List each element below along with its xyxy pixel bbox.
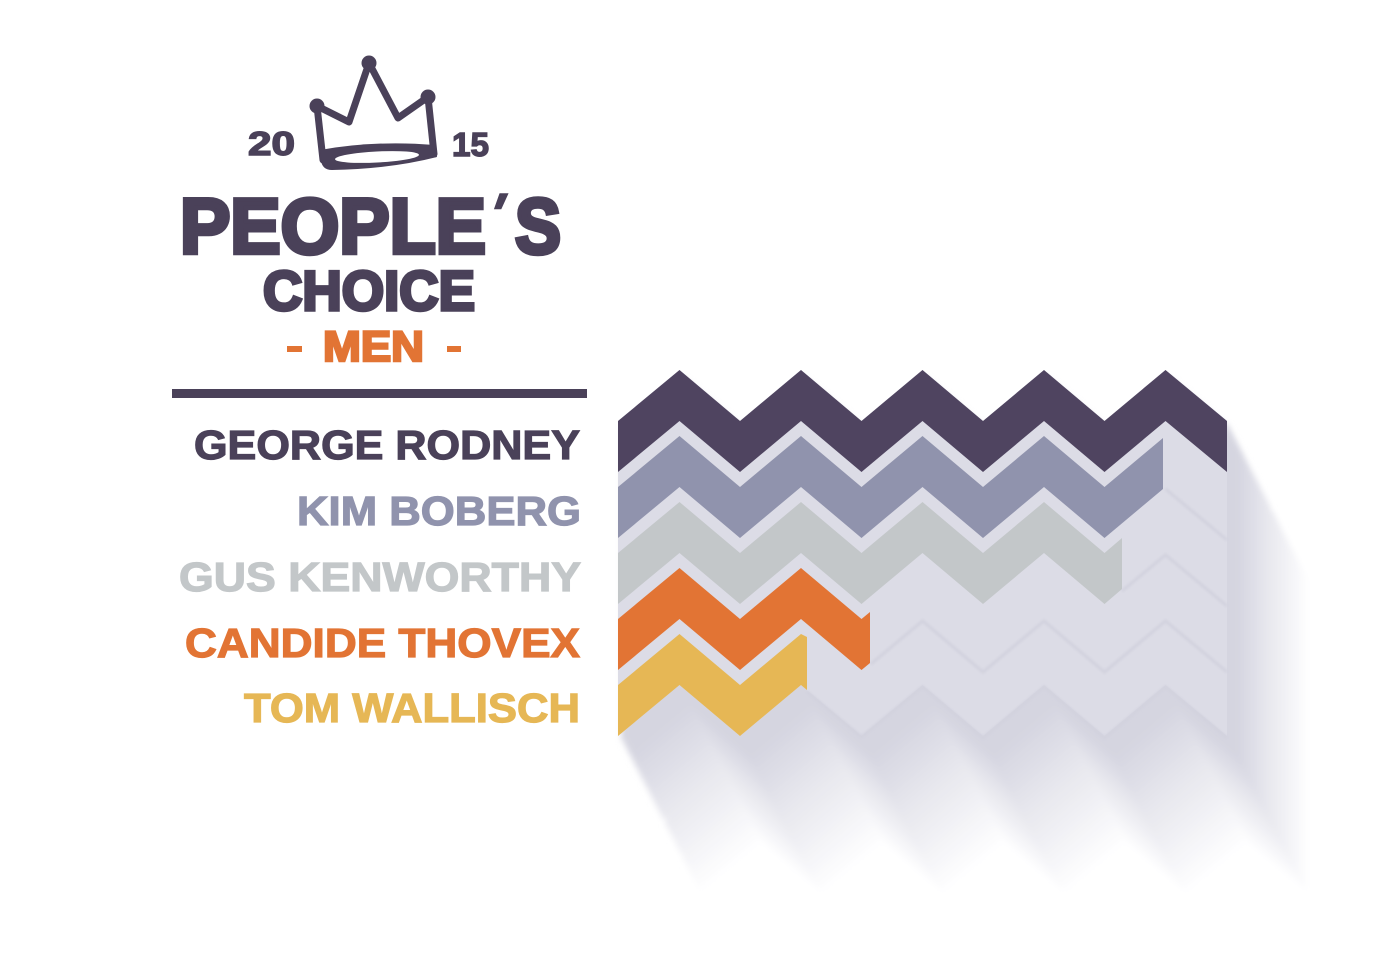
band: Candide Thovex	[618, 568, 870, 670]
name list	[179, 422, 581, 731]
name: Tom Wallisch: TOM WALLISCH	[244, 685, 580, 731]
year: 15: 15	[452, 126, 489, 163]
heading: people's: PEOPLE	[180, 182, 486, 270]
band: Tom Wallisch	[618, 634, 807, 736]
name: Candide Thovex: CANDIDE THOVEX	[185, 620, 580, 666]
name: Gus Kenworthy: GUS KENWORTHY	[179, 554, 581, 600]
band: George Rodney	[618, 370, 1227, 472]
name: Kim Boberg: KIM BOBERG	[297, 488, 581, 534]
logo: people's choice men	[180, 56, 561, 371]
empty-track chevron lines	[807, 489, 1227, 738]
zigzag chart	[618, 370, 1309, 895]
heading: people's: S	[515, 182, 561, 270]
divider rule	[172, 389, 587, 398]
band: Gus Kenworthy	[618, 502, 1122, 604]
chart background	[618, 370, 1227, 736]
band: Kim Boberg	[618, 436, 1163, 538]
subheading: men: MEN	[323, 323, 424, 371]
heading: people's: '	[475, 182, 516, 248]
icon: crown	[310, 56, 437, 170]
name: George Rodney: GEORGE RODNEY	[194, 422, 580, 468]
subheading: men	[287, 323, 461, 371]
long shadow	[621, 376, 1309, 895]
heading: choice: CHOICE	[263, 259, 475, 322]
year: 20: 20	[248, 125, 295, 162]
